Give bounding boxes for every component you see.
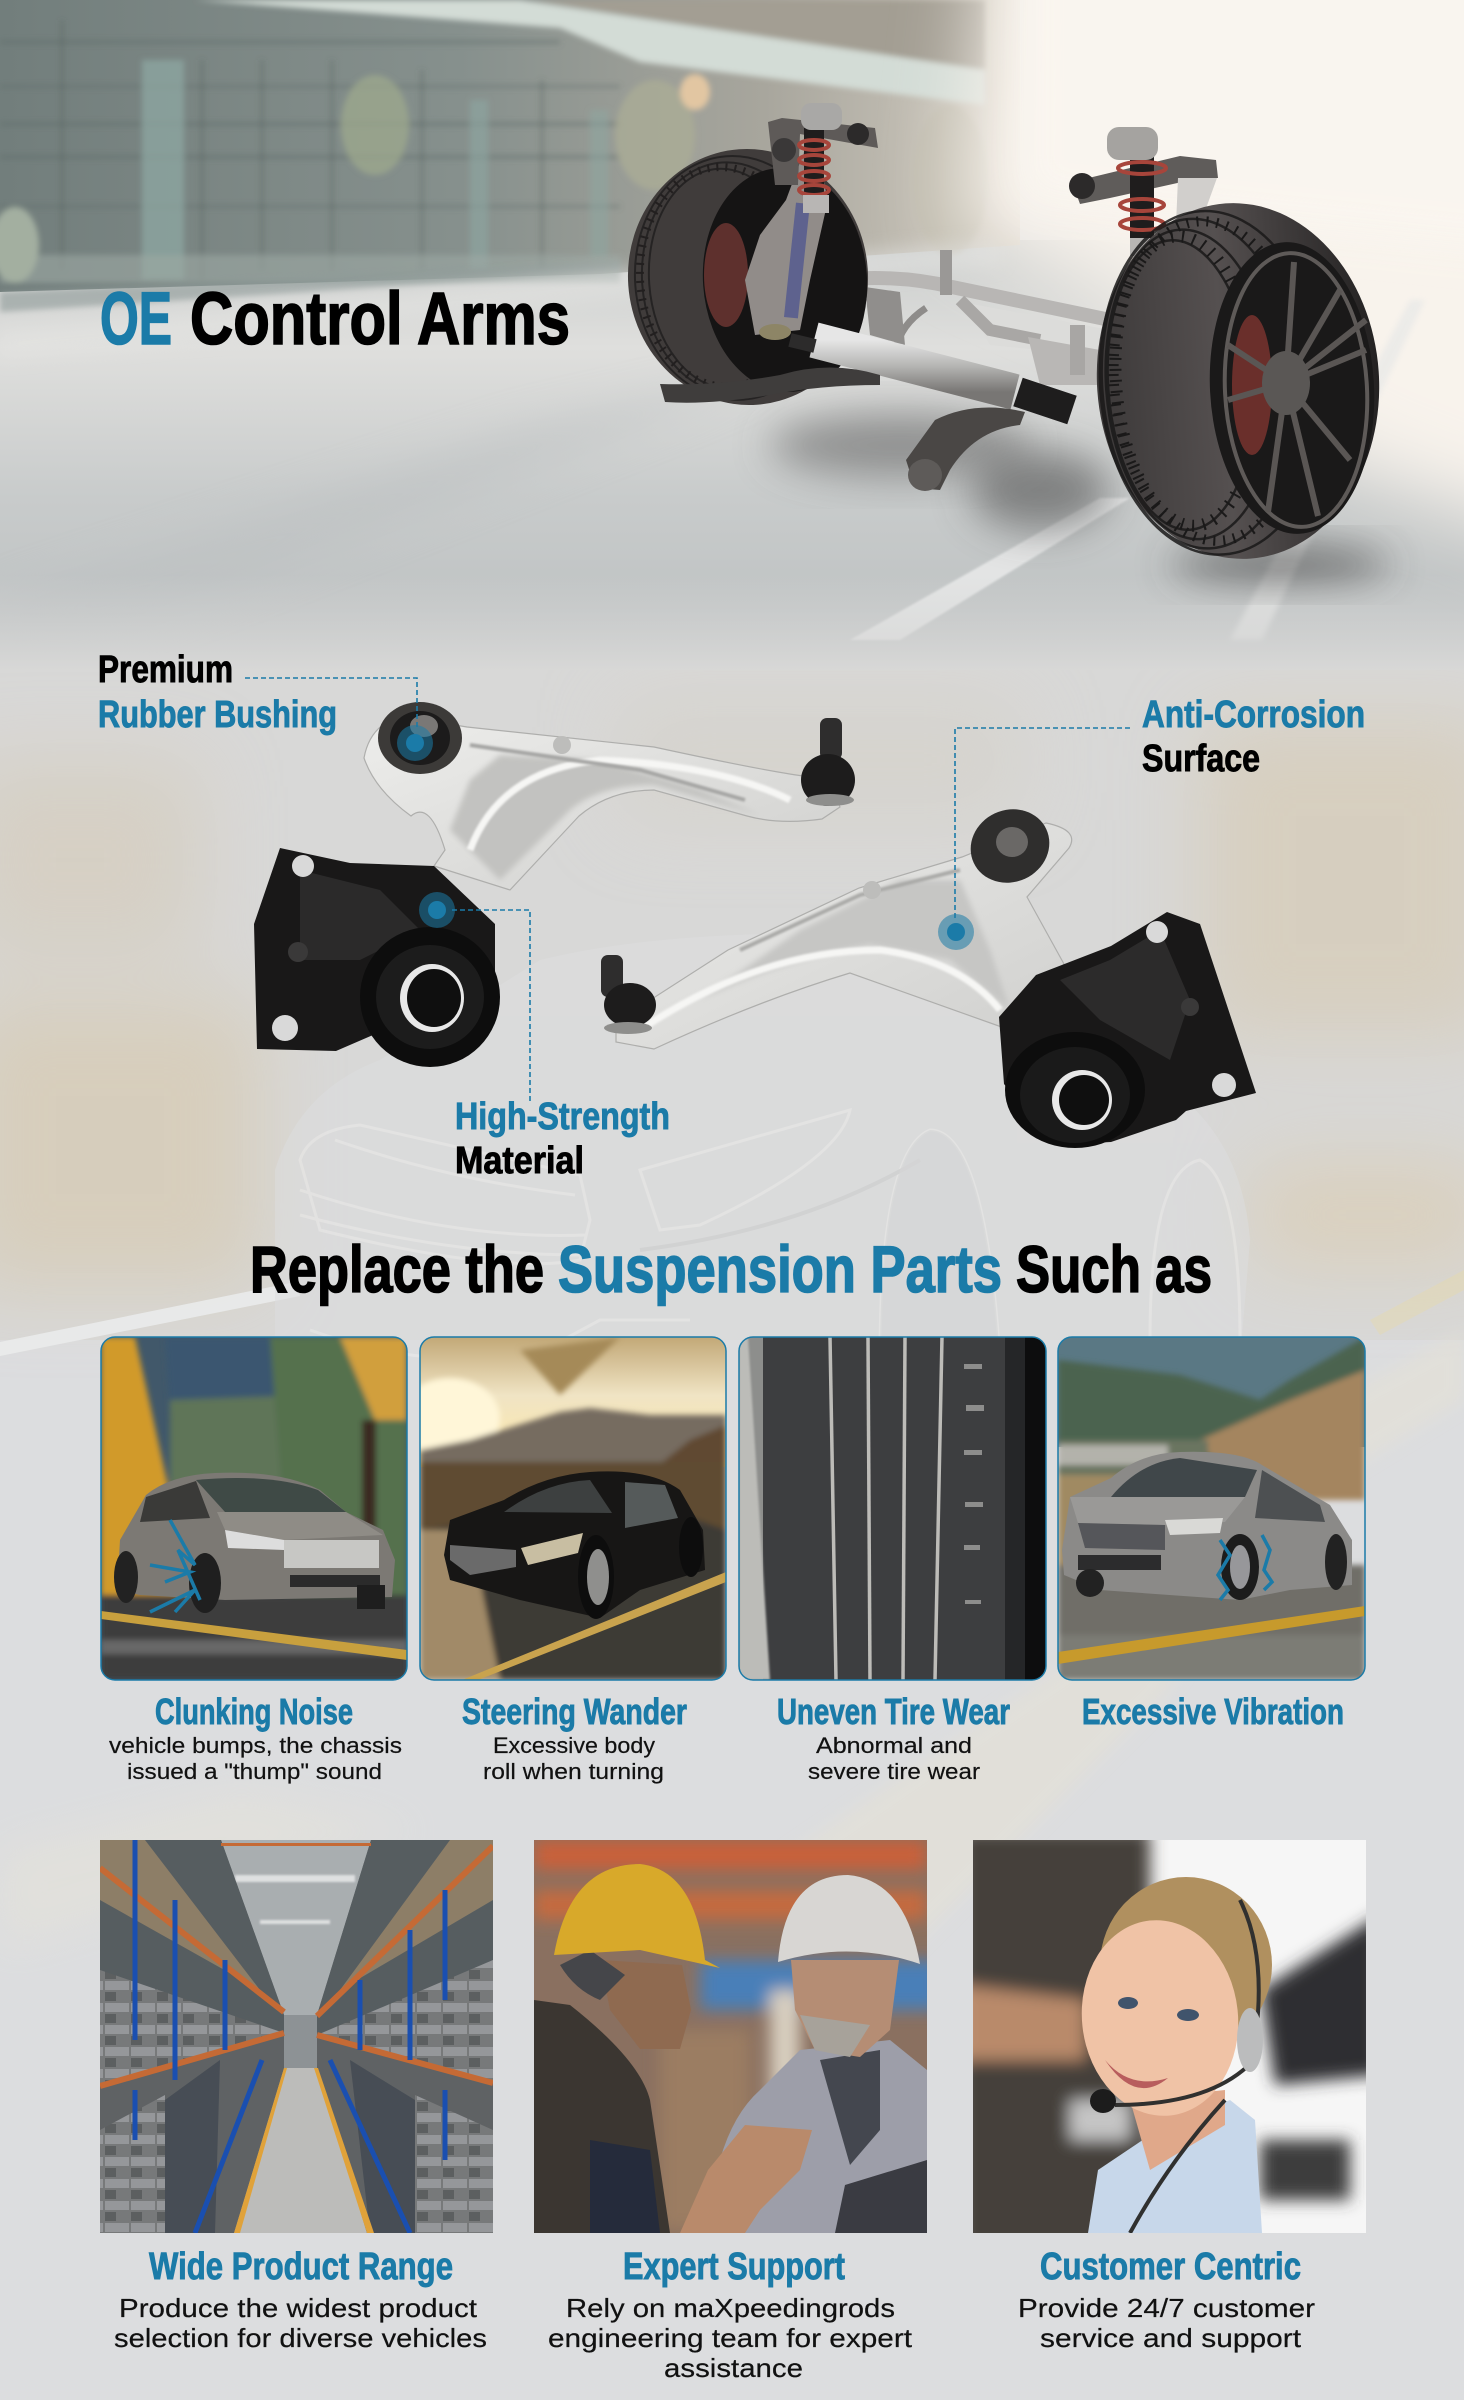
panel: Customer Centric <box>960 1830 1380 2353</box>
title: OE Control Arms: OE <box>100 277 172 360</box>
photo: warehouse aisle <box>100 1840 493 2233</box>
product: left control arm <box>254 702 855 1067</box>
lower arms <box>660 368 1025 491</box>
callout: Anti-Corrosion Surface <box>938 694 1365 950</box>
upper shelves <box>221 1840 284 2015</box>
left wheel <box>619 130 877 413</box>
callout: High-Strength Material <box>419 892 670 1182</box>
description: service and support <box>1040 2323 1302 2353</box>
label: Customer Centric <box>1040 2246 1301 2288</box>
upper bushing <box>959 796 1061 896</box>
description: Produce the widest product <box>119 2293 478 2323</box>
car <box>444 1471 705 1618</box>
car <box>117 1473 395 1600</box>
hair <box>1100 1877 1272 2053</box>
description: Excessive body <box>493 1733 656 1758</box>
lower shelves <box>234 2068 284 2232</box>
description <box>483 1733 664 1784</box>
description: selection for diverse vehicles <box>114 2323 487 2353</box>
photo: worn tire tread <box>739 1337 1046 1680</box>
face <box>1072 1912 1248 2124</box>
title: OE Control Arms <box>100 277 570 360</box>
title: OE Control Arms: Control Arms <box>190 277 570 360</box>
label: Clunking Noise <box>155 1691 353 1732</box>
rear bracket and bushing <box>999 912 1256 1148</box>
description: severe tire wear <box>808 1759 981 1784</box>
description: Abnormal and <box>816 1733 972 1758</box>
steering rack <box>759 324 1072 410</box>
silver arm <box>616 823 1072 1049</box>
description <box>808 1733 981 1784</box>
rear bracket and bushing <box>254 848 500 1067</box>
photo: grey car on forest road <box>101 1337 407 1680</box>
neck <box>1130 2090 1225 2170</box>
subframe <box>819 250 1110 385</box>
car <box>1062 1452 1352 1600</box>
right worker <box>708 2040 927 2233</box>
silver arm <box>364 716 840 890</box>
description <box>548 2293 913 2383</box>
heading: Replace the Suspension Parts Such as: Suspension Parts <box>558 1232 1002 1306</box>
panel: Wide Product Range <box>100 1840 493 2353</box>
icon: suspension assembly with wheels <box>619 103 1391 568</box>
label: Uneven Tire Wear <box>777 1691 1010 1732</box>
ball joint <box>601 955 656 1034</box>
description <box>1018 2293 1315 2353</box>
callout: High-Strength Material: High-Strength <box>455 1096 670 1138</box>
hand and tablet <box>680 2125 812 2233</box>
description: Provide 24/7 customer <box>1018 2293 1315 2323</box>
callout: Premium Rubber Bushing <box>98 649 433 761</box>
left strut with spring <box>768 103 878 213</box>
shirt <box>1088 2100 1262 2233</box>
photo: call-centre agent with headset <box>960 1830 1380 2250</box>
left worker <box>534 2000 670 2233</box>
description: engineering team for expert <box>548 2323 913 2353</box>
description: Rely on maXpeedingrods <box>566 2293 895 2323</box>
headset <box>1115 1900 1259 2233</box>
callout: Anti-Corrosion Surface: Anti-Corrosion <box>1142 694 1365 736</box>
panel: Steering Wander <box>400 1337 726 1784</box>
callout: Anti-Corrosion Surface: Surface <box>1142 738 1260 780</box>
right strut with spring <box>1069 127 1218 256</box>
heading: Replace the Suspension Parts Such as <box>250 1232 1212 1306</box>
right wheel <box>1085 194 1391 568</box>
panel: Expert Support <box>534 1840 940 2383</box>
description: roll when turning <box>483 1759 664 1784</box>
product: right control arm <box>601 796 1256 1148</box>
panel: Excessive Vibration <box>1058 1337 1365 1732</box>
description: assistance <box>664 2353 803 2383</box>
description: vehicle bumps, the chassis <box>109 1733 402 1758</box>
callout: Premium Rubber Bushing: Premium <box>98 649 233 691</box>
panel: Clunking Noise <box>101 1337 407 1784</box>
photo: silver car on mountain road <box>1058 1337 1365 1680</box>
label: Excessive Vibration <box>1082 1691 1344 1732</box>
ball joint <box>801 718 855 806</box>
photo: two engineers in hard hats <box>534 1840 940 2233</box>
label: Expert Support <box>623 2246 845 2288</box>
label: Steering Wander <box>462 1691 687 1732</box>
description <box>109 1733 402 1784</box>
photo: black car at sunset <box>400 1337 726 1680</box>
panel: Uneven Tire Wear <box>739 1337 1046 1784</box>
ghost car backdrop <box>275 933 1250 1360</box>
heading: Replace the Suspension Parts Such as: Replace the <box>250 1232 544 1306</box>
hero background: street scene <box>0 0 1464 671</box>
label: Wide Product Range <box>149 2246 453 2288</box>
upper bushing <box>378 702 462 774</box>
callout: High-Strength Material: Material <box>455 1140 584 1182</box>
description: issued a "thump" sound <box>127 1759 382 1784</box>
heading: Replace the Suspension Parts Such as: Such as <box>1016 1232 1212 1306</box>
callout: Premium Rubber Bushing: Rubber Bushing <box>98 694 337 736</box>
description <box>114 2293 487 2353</box>
